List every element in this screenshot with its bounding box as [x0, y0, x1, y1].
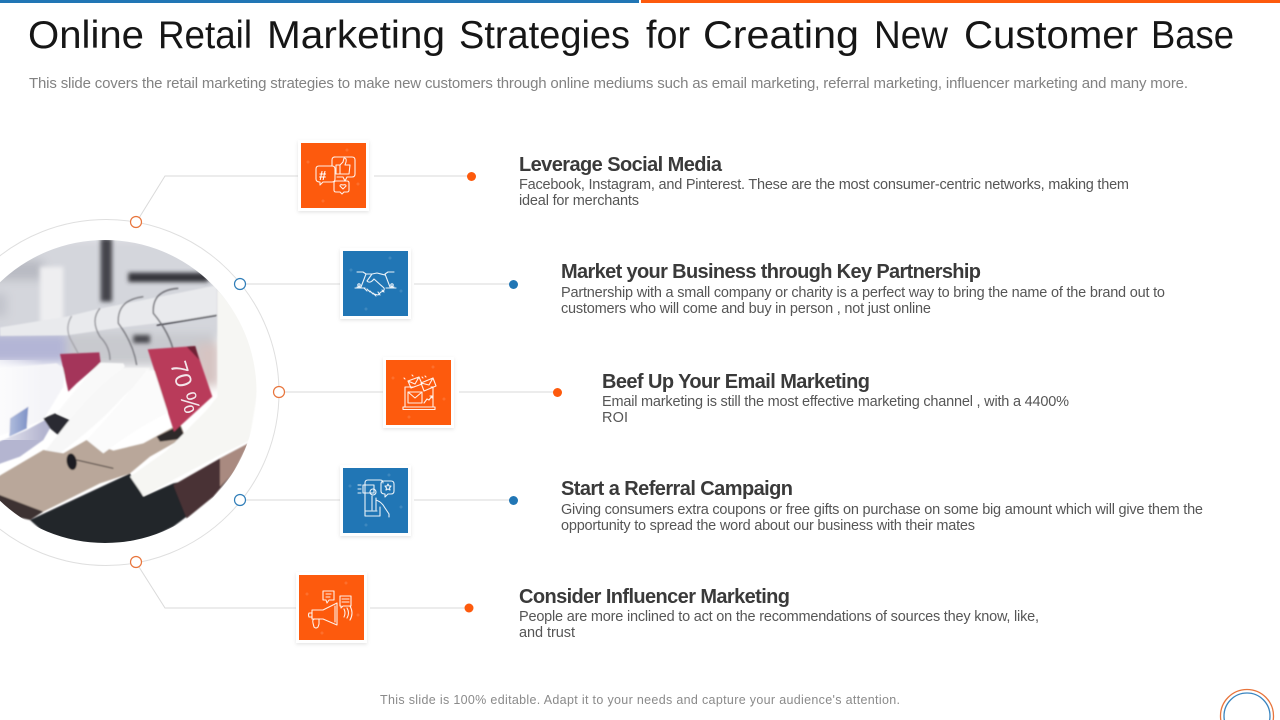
- text block: key partnership: Partnership with a small company or charity is a perfect way to bring the name of the brand out to: [561, 285, 1165, 301]
- brown lower right: [173, 443, 248, 518]
- icon: email marketing: [383, 357, 454, 428]
- text block: influencer marketing: Consider Influencer Marketing: [519, 586, 790, 608]
- title: New: [874, 14, 949, 57]
- main tag: [148, 346, 212, 432]
- text block: leverage social media: [519, 154, 1129, 209]
- large front hanger: [130, 289, 258, 496]
- icon: social media: [298, 140, 369, 211]
- hooks: [68, 316, 80, 357]
- text block: key partnership: customers who will come and buy in person , not just online: [561, 301, 931, 317]
- title: Customer: [964, 14, 1138, 57]
- connector lines: [139, 176, 557, 608]
- text block: leverage social media: ideal for merchants: [519, 193, 639, 209]
- text block: leverage social media: Leverage Social Media: [519, 154, 723, 176]
- text block: influencer marketing: People are more inclined to act on the recommendations of sources they know, like,: [519, 609, 1039, 625]
- ring nodes: [130, 216, 284, 568]
- text block: key partnership: Market your Business through Key Partnership: [561, 261, 981, 283]
- title: Base: [1151, 14, 1234, 57]
- title: Online: [28, 14, 144, 57]
- icon: referral campaign: [340, 465, 411, 536]
- photo tag text: 70 %: [165, 358, 206, 416]
- end dots: [464, 172, 562, 612]
- rail: [0, 285, 217, 336]
- text block: leverage social media: Facebook, Instagram, and Pinterest. These are the most consumer-centric networks, making them: [519, 177, 1129, 193]
- text block: email marketing: [602, 371, 1069, 426]
- top accent bar: [0, 0, 1280, 3]
- text block: referral campaign: opportunity to spread the word about our business with their mates: [561, 518, 975, 534]
- title: [28, 14, 1234, 57]
- title: Creating: [703, 14, 859, 57]
- text block: referral campaign: Start a Referral Campaign: [561, 478, 793, 500]
- photo: clothes rack with sale tags: [0, 240, 256, 543]
- title: Strategies: [459, 14, 630, 57]
- text block: influencer marketing: and trust: [519, 625, 575, 641]
- text block: email marketing: Email marketing is still the most effective marketing channel , with a 4400%: [602, 394, 1069, 410]
- beige clothes: [0, 423, 185, 512]
- blurred store background: [0, 237, 227, 387]
- hangers: [57, 363, 125, 422]
- small tag: [60, 352, 101, 392]
- text block: email marketing: Beef Up Your Email Marketing: [602, 371, 870, 393]
- icon: handshake: [340, 248, 411, 319]
- title: for: [646, 14, 690, 57]
- text block: referral campaign: [561, 478, 1203, 534]
- text block: key partnership: [561, 261, 1165, 317]
- icon: social media: #: [319, 168, 327, 183]
- title: Marketing: [267, 14, 445, 57]
- title: Retail: [158, 14, 252, 57]
- corner logo rings: [1220, 690, 1274, 720]
- text block: email marketing: ROI: [602, 410, 628, 426]
- icon: influencer marketing: [296, 572, 367, 643]
- left white garments: [0, 363, 65, 440]
- text block: referral campaign: Giving consumers extra coupons or free gifts on purchase on some big amount which will give them the: [561, 502, 1203, 518]
- subtitle: This slide covers the retail marketing strategies to make new customers through online mediums such as email marketing, referral marketing, influencer marketing and many more.: [29, 75, 1188, 92]
- outer ring: [0, 220, 279, 566]
- text block: influencer marketing: [519, 586, 1039, 641]
- footer note: This slide is 100% editable. Adapt it to your needs and capture your audience's attention.: [380, 693, 900, 707]
- dark sweater: [30, 472, 187, 543]
